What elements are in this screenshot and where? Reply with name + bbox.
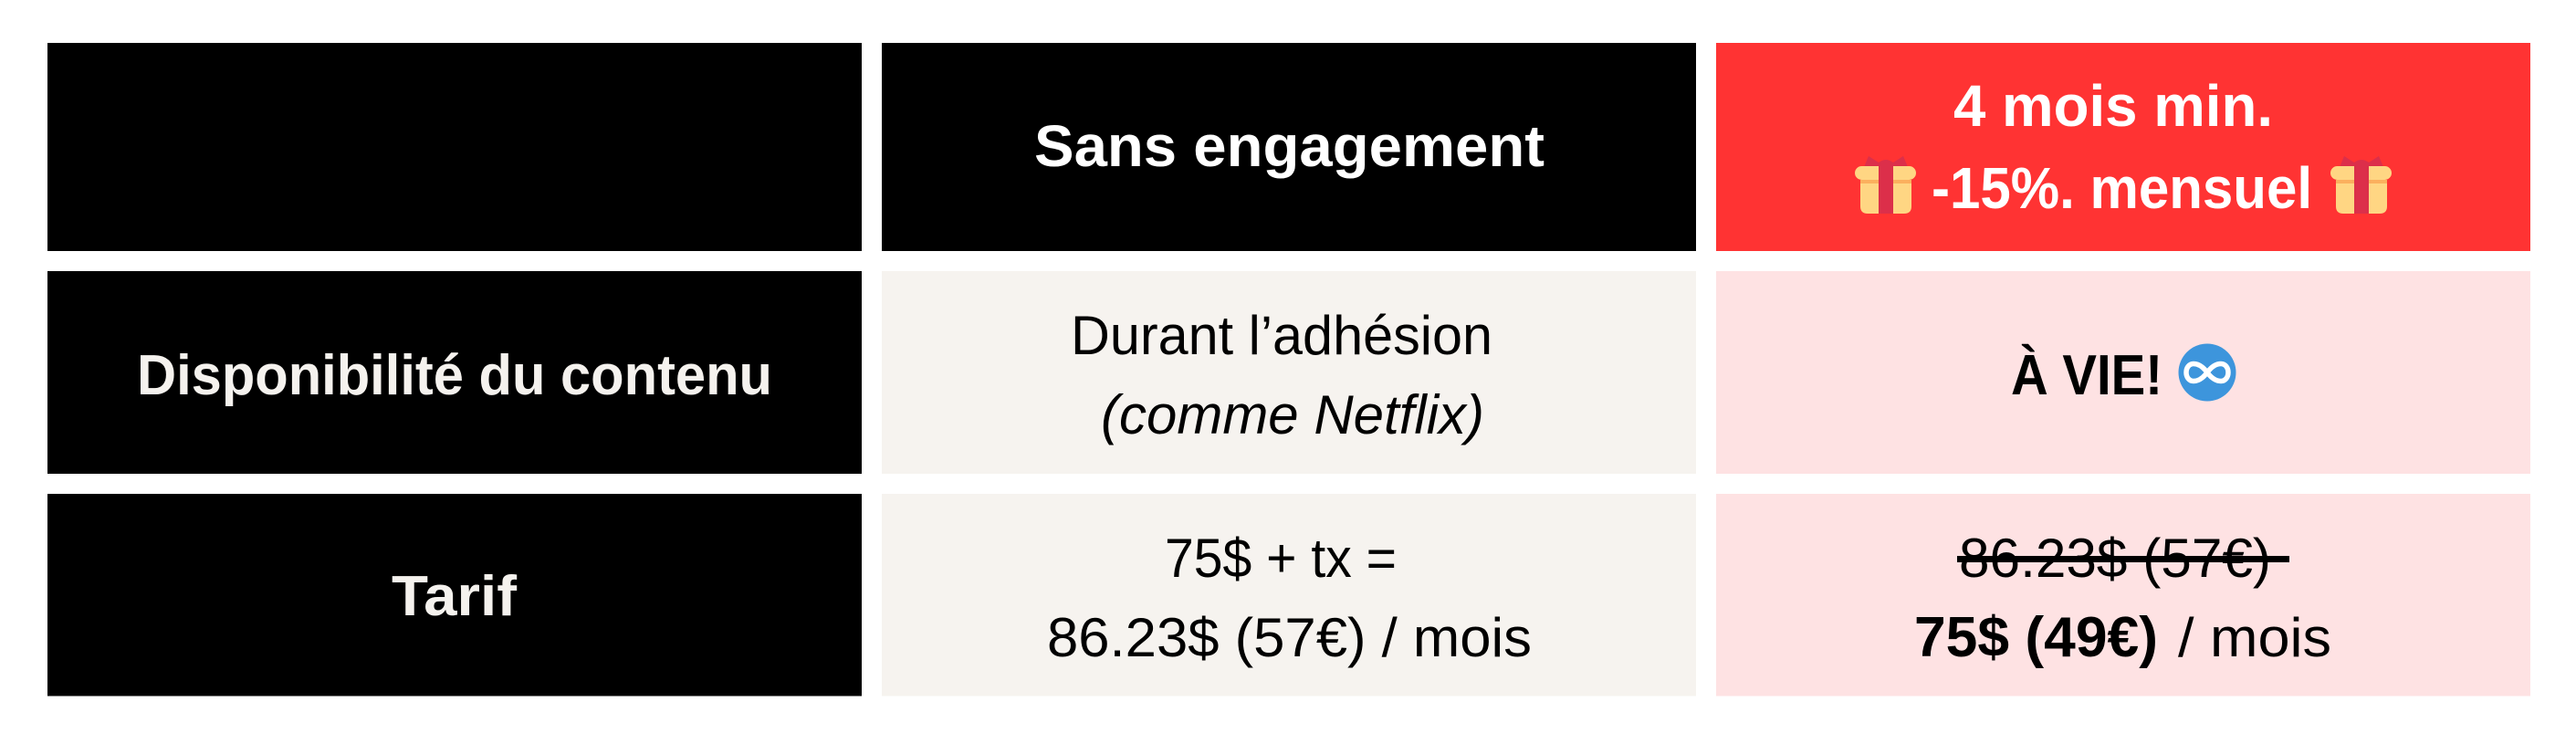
panel: availability with four month plan [1716,271,2530,474]
panel: price with four month plan [1716,494,2530,696]
icon: right gift [2330,156,2392,214]
text: comme Netflix: (comme Netflix) [1101,384,1484,445]
panel: empty header cell [47,43,862,251]
panel: price label [47,494,862,696]
label: Disponibilité du contenu: Disponibilité du contenu [137,344,772,407]
panel: content availability label [47,271,862,474]
icon: left gift [1855,156,1916,214]
heading: discount: -15%. mensuel [1932,155,2312,221]
text: base price: 75$ + tx = [1165,528,1397,589]
label: Tarif: Tarif [392,565,517,628]
panel: four month minimum header [1716,43,2530,251]
text: À VIE!: À VIE! [2011,344,2162,407]
text: monthly price: 86.23$ (57€) / mois [1047,607,1532,668]
text: old price: 86.23$ (57€) [1959,528,2271,589]
text: discounted price: 75$ (49€) [1914,606,2158,669]
panel: availability without commitment [882,271,1696,474]
icon: infinity [2178,343,2236,402]
heading: Sans engagement: Sans engagement [1034,113,1545,179]
text: per month: / mois [2178,607,2331,668]
panel: price without commitment [882,494,1696,696]
text: Durant l’adhésion: Durant l’adhésion [1071,305,1492,366]
panel: no commitment header [882,43,1696,251]
heading: 4 mois min.: 4 mois min. [1953,73,2273,139]
strikethrough line [1957,556,2289,562]
